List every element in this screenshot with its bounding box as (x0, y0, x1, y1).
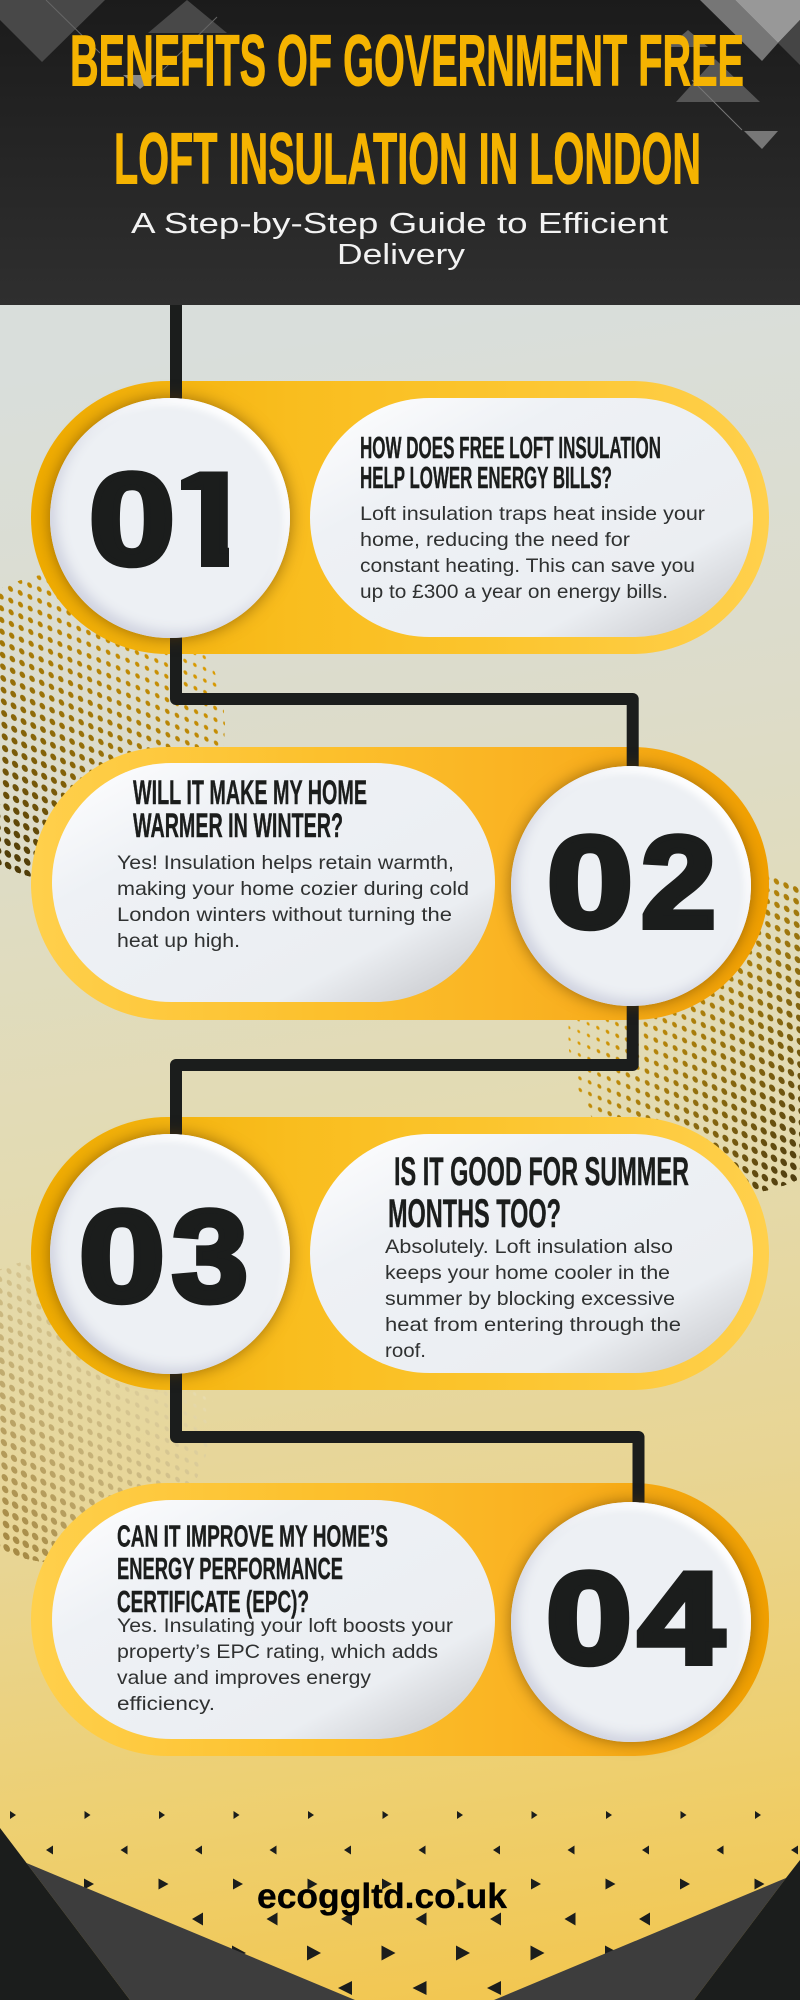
pill background (31, 747, 769, 1020)
number 02 (547, 809, 716, 955)
body text (360, 503, 706, 603)
pill background (31, 1117, 769, 1390)
heading: MONTHS TOO? (388, 1192, 561, 1236)
number 03 (79, 1183, 248, 1329)
number 03: 3 (172, 1183, 248, 1329)
step 3 text (79, 1150, 689, 1362)
body text (385, 1236, 681, 1362)
body text: efficiency. (117, 1693, 215, 1715)
body text: London winters without turning the (117, 904, 452, 926)
number 01: 0 (89, 446, 175, 592)
heading: CAN IT IMPROVE MY HOME’S (117, 1518, 388, 1554)
text pill (310, 398, 753, 637)
number 01: 1 (157, 446, 257, 592)
subtitle: A Step-by-Step Guide to Efficient (131, 208, 668, 240)
panel: step 1 (31, 381, 769, 654)
left corner shapes (0, 1828, 355, 2000)
website url: ecoggltd.co.uk (257, 1877, 508, 1916)
body text: home, reducing the need for (360, 529, 631, 551)
text pill (310, 1134, 753, 1373)
heading (133, 774, 367, 845)
heading: WARMER IN WINTER? (133, 807, 343, 845)
title (70, 22, 744, 200)
number 01 (92, 470, 229, 568)
heading: ENERGY PERFORMANCE (117, 1551, 343, 1586)
halftone dot patterns (0, 575, 800, 1562)
number badge (50, 398, 290, 638)
body text: property’s EPC rating, which adds (117, 1641, 438, 1663)
heading: WILL IT MAKE MY HOME (133, 774, 367, 812)
number 03: 0 (79, 1183, 165, 1329)
step 2 text (117, 774, 716, 955)
header band (0, 0, 800, 305)
body text (117, 1615, 454, 1715)
body text (117, 852, 469, 952)
body text: making your home cozier during cold (117, 878, 469, 900)
body text: Loft insulation traps heat inside your (360, 503, 706, 525)
panel: step 2 (31, 747, 769, 1020)
subtitle (131, 208, 668, 271)
step 1 text (89, 431, 706, 603)
number 04: 0 (546, 1545, 632, 1691)
body text: heat up high. (117, 930, 240, 952)
arrow pattern (10, 1811, 798, 1995)
text pill (52, 763, 495, 1002)
number badge (50, 1134, 290, 1374)
right corner shapes (494, 1860, 800, 2000)
panel: step 3 (31, 1117, 769, 1390)
footer (0, 1811, 800, 2000)
body text: heat from entering through the (385, 1314, 681, 1336)
body text: up to £300 a year on energy bills. (360, 581, 668, 603)
heading (117, 1518, 388, 1619)
decorative triangles (0, 0, 800, 149)
step 4 text (117, 1518, 727, 1715)
subtitle: Delivery (337, 239, 466, 271)
pill background (31, 381, 769, 654)
number 02: 2 (641, 809, 716, 955)
body text: summer by blocking excessive (385, 1288, 675, 1310)
panel: step 4 (31, 1483, 769, 1756)
number 02: 0 (547, 809, 633, 955)
body text: Yes! Insulation helps retain warmth, (117, 852, 454, 874)
body text: keeps your home cooler in the (385, 1262, 670, 1284)
body text: constant heating. This can save you (360, 555, 695, 577)
number badge (511, 1502, 751, 1742)
body text: Absolutely. Loft insulation also (385, 1236, 673, 1258)
pill background (31, 1483, 769, 1756)
body text: Yes. Insulating your loft boosts your (117, 1615, 454, 1637)
text pill (52, 1500, 495, 1739)
number badge (511, 766, 751, 1006)
heading (388, 1150, 689, 1236)
number 04 (546, 1545, 724, 1691)
number 04: 4 (638, 1545, 724, 1691)
heading: CERTIFICATE (EPC)? (117, 1584, 309, 1619)
heading (360, 431, 661, 495)
body text: value and improves energy (117, 1667, 371, 1689)
body text: roof. (385, 1340, 426, 1362)
